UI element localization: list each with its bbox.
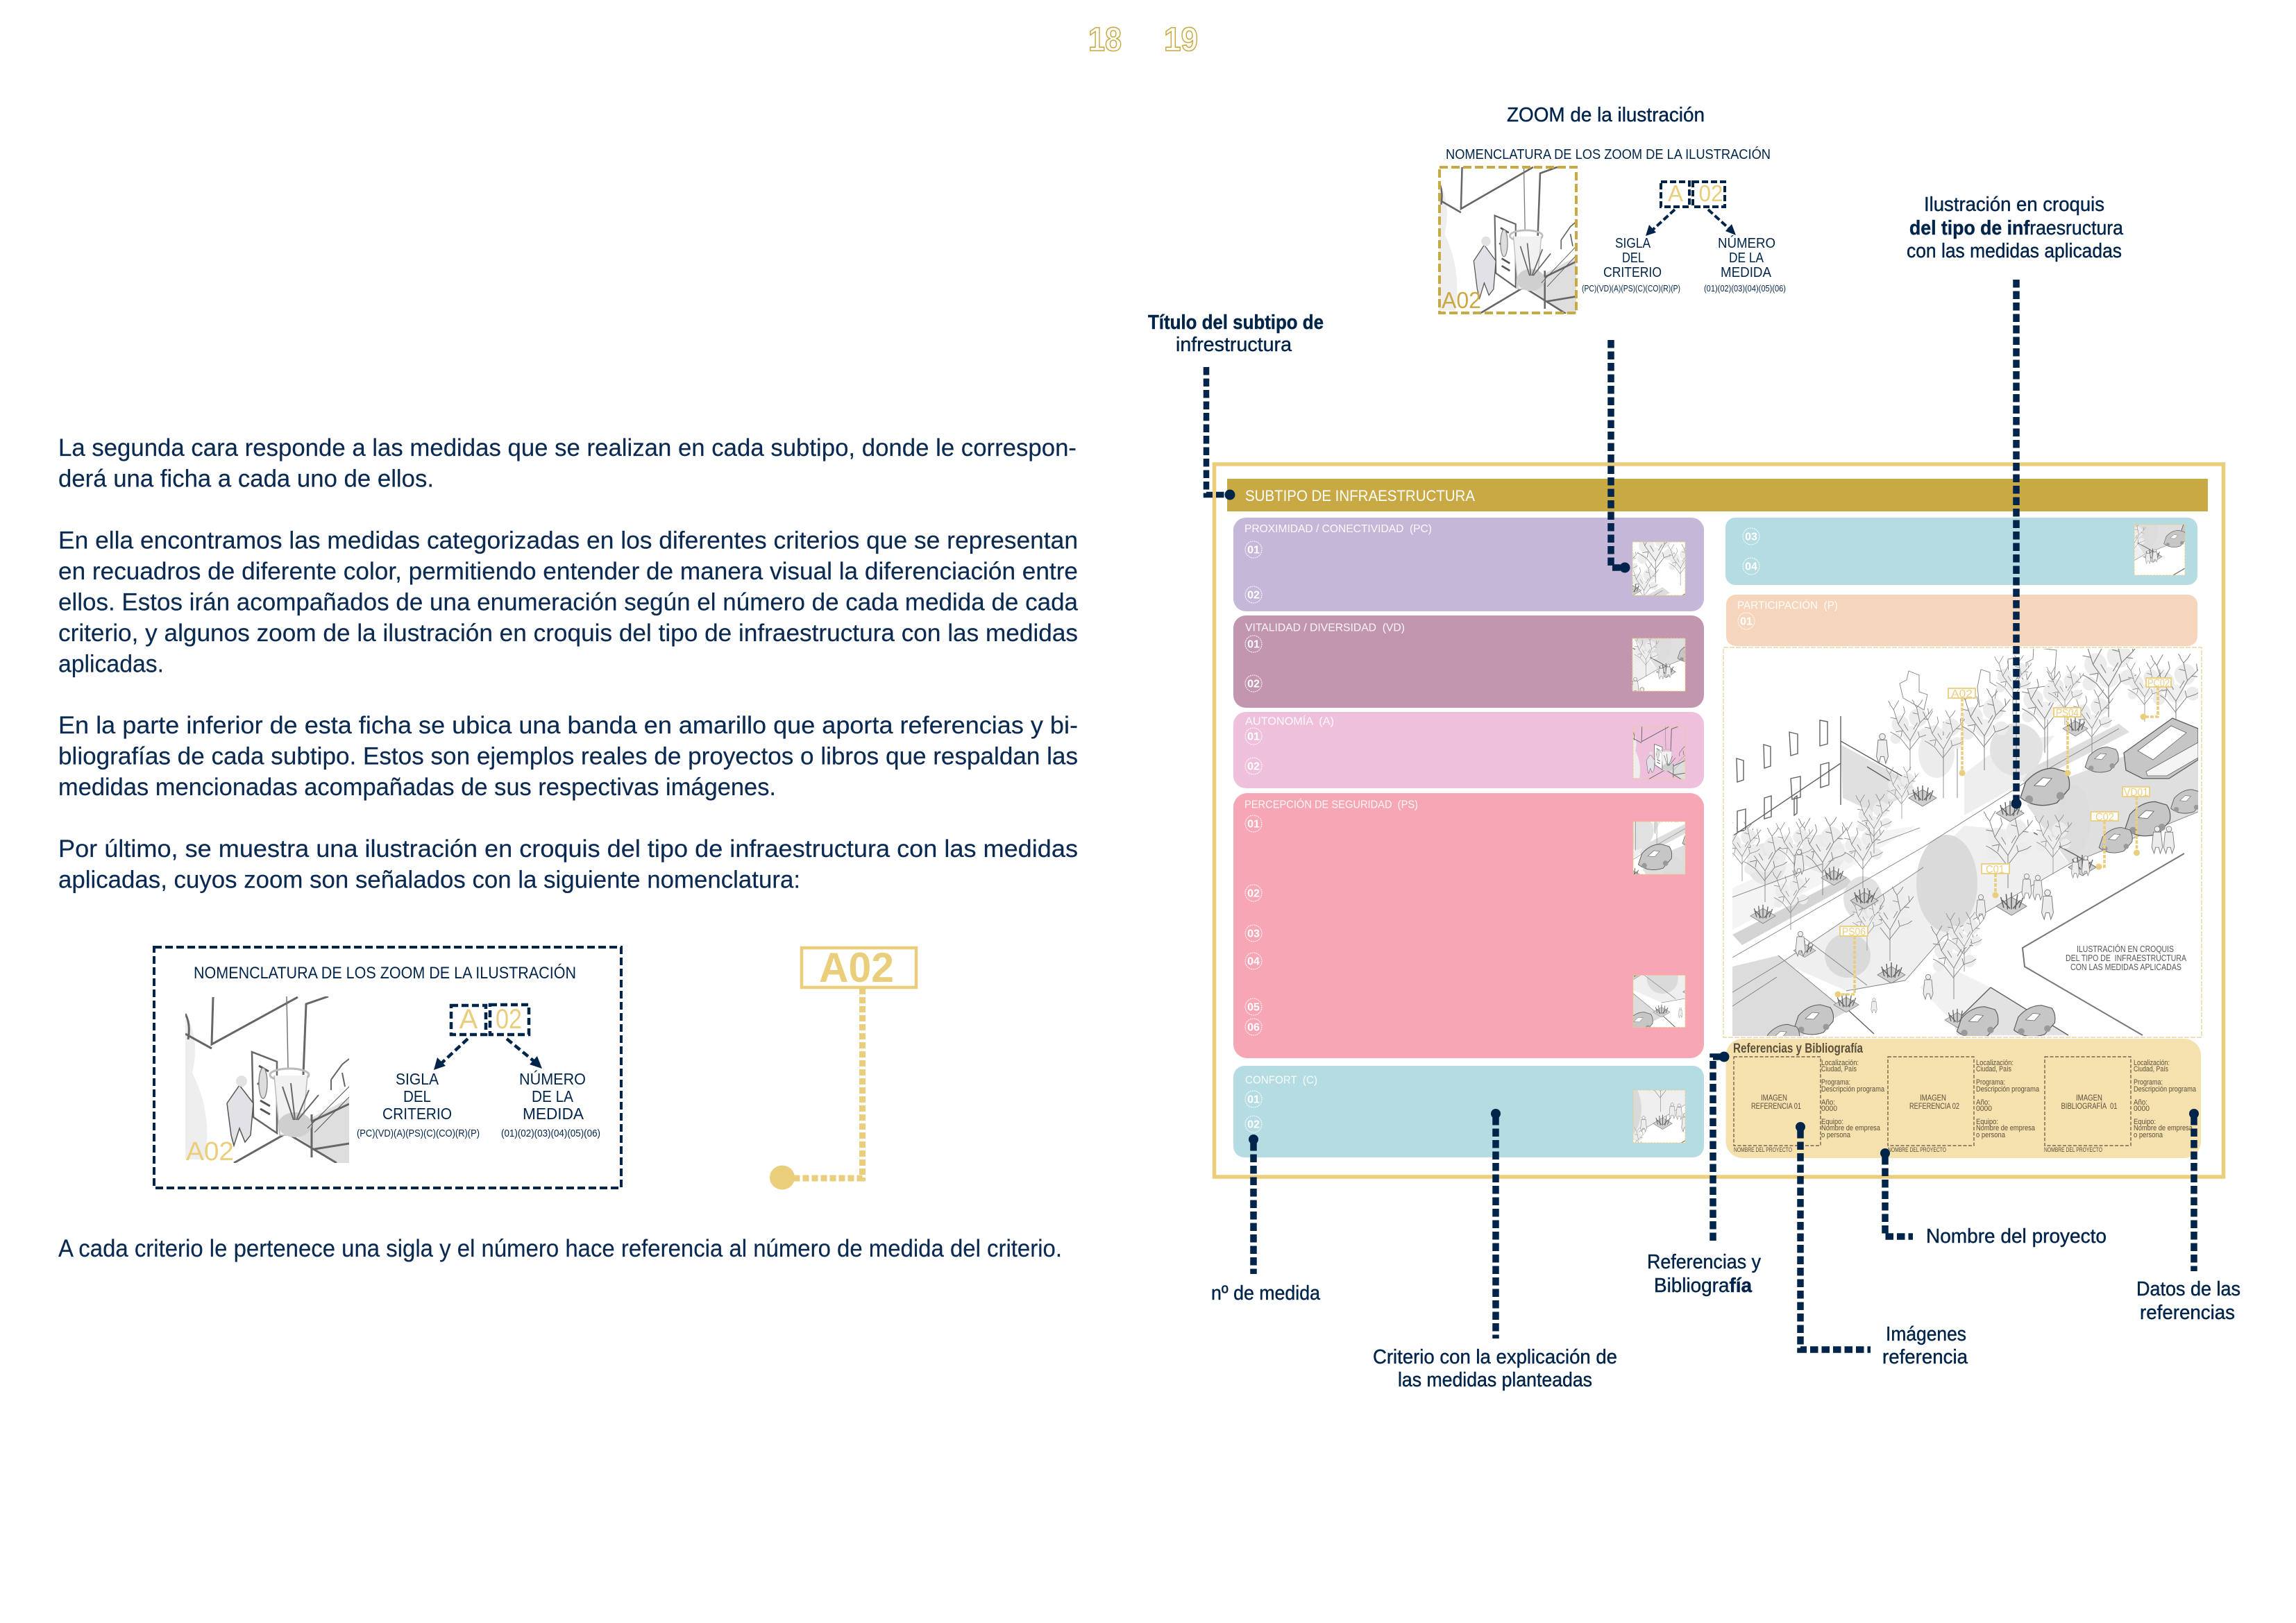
code boxes A and 02 xyxy=(451,1004,529,1035)
label: datos de las referencias: referencias xyxy=(2140,1302,2235,1324)
label: referencias y bibliografia xyxy=(1647,1251,1761,1297)
reference 02: Ciudad, País xyxy=(1976,1065,2011,1073)
bibliography 01: NOMBRE DEL PROYECTO xyxy=(2044,1146,2102,1154)
sigla del criterio: (PC)(VD)(A)(PS)(C)(CO)(R)(P) xyxy=(357,1128,480,1139)
tag C02: C02 xyxy=(2095,812,2114,823)
thumbnail: VD01 xyxy=(1419,509,1749,799)
bushes xyxy=(1850,888,1878,909)
thumbnail: A02 xyxy=(1633,726,1685,779)
label: datos de las referencias: Datos de las xyxy=(2136,1278,2240,1300)
paragraph 3 xyxy=(58,712,1078,801)
reference 01: Equipo: xyxy=(1821,1118,1843,1126)
paragraph 3: medidas mencionadas acompañadas de sus respectivas imágenes. xyxy=(58,774,776,801)
panel: confort xyxy=(1233,1066,1704,1157)
panel: vitalidad diversidad: VITALIDAD / DIVERSIDAD (VD) xyxy=(1245,622,1405,634)
small sigla text: (PC)(VD)(A)(PS)(C)(CO)(R)(P) xyxy=(1582,283,1680,294)
bibliography 01 xyxy=(2044,1057,2197,1154)
bibliography 01: BIBLIOGRAFÍA 01 xyxy=(2061,1102,2117,1111)
numero de la medida: MEDIDA xyxy=(523,1105,584,1123)
bibliography 01: o persona xyxy=(2134,1131,2163,1139)
title bar: SUBTIPO DE INFRAESTRUCTURA xyxy=(1245,487,1475,504)
reference 02: REFERENCIA 02 xyxy=(1909,1103,1959,1111)
thumbnail: PS06 xyxy=(1578,758,1905,1044)
label: criterio: Criterio con la explicación de xyxy=(1373,1346,1617,1368)
tag A02: A02 xyxy=(1951,688,1973,700)
panel: percepcion de seguridad: 01 xyxy=(1247,819,1260,830)
title bar xyxy=(1227,479,2208,511)
label: imagenes referencia: referencia xyxy=(1882,1346,1968,1368)
reference 01: REFERENCIA 01 xyxy=(1751,1103,1801,1111)
panel: vitalidad diversidad: 02 xyxy=(1247,679,1260,690)
paragraph 3: En la parte inferior de esta ficha se ubica una banda en amarillo que aporta referencias y bi- xyxy=(58,712,1078,739)
label: referencias y bibliografia: Bibliografía xyxy=(1654,1275,1753,1297)
leader: nombre del proyecto xyxy=(1880,1148,1913,1237)
small numero text: MEDIDA xyxy=(1721,265,1772,280)
paragraph 1 xyxy=(58,434,1077,493)
label: ilustracion en croquis xyxy=(1907,194,2124,262)
paragraph 2: en recuadros de diferente color, permitiendo entender de manera visual la diferenciación entre xyxy=(58,558,1078,585)
panel: autonomia: 01 xyxy=(1247,731,1260,742)
small arrow right xyxy=(1708,210,1736,235)
small arrow left xyxy=(1646,210,1675,236)
paragraph 4: aplicadas, cuyos zoom son señalados con la siguiente nomenclatura: xyxy=(58,866,800,894)
zoom sketch A02 xyxy=(185,996,349,1166)
reference 02: Programa: xyxy=(1976,1078,2005,1087)
reference 01: Programa: xyxy=(1821,1078,1850,1087)
small sigla text xyxy=(1582,236,1680,294)
label: titulo del subtipo xyxy=(1148,312,1324,356)
boundary of white corner xyxy=(2023,853,2184,1035)
small numero text: NÚMERO xyxy=(1718,235,1775,251)
caption inside illustration xyxy=(2066,944,2186,972)
label: criterio: las medidas planteadas xyxy=(1398,1369,1592,1391)
label: datos de las referencias xyxy=(2136,1278,2240,1324)
paragraph 4: Por último, se muestra una ilustración en croquis del tipo de infraestructura con las medidas xyxy=(58,835,1078,863)
reference 02: 0000 xyxy=(1976,1105,1992,1113)
paragraph 2: ellos. Estos irán acompañados de una enumeración según el número de cada medida de cada xyxy=(58,588,1079,616)
label: criterio xyxy=(1373,1346,1617,1391)
zoom sketch with gold dashed frame: A02 xyxy=(1442,287,1481,313)
label: ilustracion en croquis: del tipo de infraesructura xyxy=(1909,217,2124,239)
small code boxes xyxy=(1661,180,1725,207)
paragraph 1: derá una ficha a cada uno de ellos. xyxy=(58,465,434,493)
panel: vitalidad diversidad xyxy=(1233,615,1704,708)
bibliography 01: Equipo: xyxy=(2134,1118,2156,1126)
tag example A02 with yellow leader: A02 xyxy=(819,944,894,991)
reference 01: Año: xyxy=(1821,1098,1835,1107)
bus xyxy=(2124,718,2198,779)
panel: percepcion de seguridad: 06 xyxy=(1247,1021,1260,1034)
panel: proximidad conectividad: 01 xyxy=(1247,544,1260,556)
small numero text: (01)(02)(03)(04)(05)(06) xyxy=(1704,283,1786,294)
panel: references and bibliography xyxy=(1725,1039,2201,1158)
tag PC02 xyxy=(2141,677,2171,720)
label: ilustracion en croquis: con las medidas aplicadas xyxy=(1907,240,2122,262)
zoom sketch A02: A02 xyxy=(186,1137,234,1166)
label: numero de medida: nº de medida xyxy=(1211,1282,1321,1305)
numero de la medida xyxy=(501,1070,600,1139)
numero de la medida: DE LA xyxy=(532,1087,574,1105)
label: ilustracion en croquis: Ilustración en croquis xyxy=(1924,194,2104,216)
references heading: Referencias y Bibliografía xyxy=(1733,1042,1863,1056)
panel: confort continuation: 03 xyxy=(1745,532,1757,543)
code boxes A and 02: 02 xyxy=(496,1004,522,1035)
panel: vitalidad diversidad: 01 xyxy=(1247,638,1260,651)
reference 01: Nombre de empresa xyxy=(1821,1124,1881,1132)
thumbnail: PS04 xyxy=(1436,750,1762,1039)
building windows xyxy=(1737,720,1829,832)
reference 02: o persona xyxy=(1976,1131,2006,1139)
small nomenclature diagram xyxy=(1439,146,1786,314)
panel: confort: 01 xyxy=(1247,1094,1260,1106)
leader: numero de medida xyxy=(1249,1135,1258,1274)
panel: percepcion de seguridad: 05 xyxy=(1247,1002,1260,1013)
panel: percepcion de seguridad: 04 xyxy=(1247,956,1260,967)
tag VD01: VD01 xyxy=(2124,787,2148,799)
panel: autonomia: 02 xyxy=(1247,760,1260,773)
small sigla text: SIGLA xyxy=(1615,236,1651,251)
panel: confort continuation xyxy=(1725,518,2197,585)
label: nombre del proyecto: Nombre del proyecto xyxy=(1926,1225,2107,1248)
sigla del criterio xyxy=(357,1070,480,1139)
small nomenclature heading: NOMENCLATURA DE LOS ZOOM DE LA ILUSTRACIÓN xyxy=(1446,146,1771,162)
panel: confort: CONFORT (C) xyxy=(1245,1074,1317,1087)
leader: imagenes xyxy=(1796,1122,1871,1350)
paragraph 2: criterio, y algunos zoom de la ilustración en croquis del tipo de infraestructura con las medidas xyxy=(58,620,1078,647)
label: imagenes referencia xyxy=(1882,1323,1968,1368)
thumbnail: C02 xyxy=(1915,401,2232,679)
closing sentence: A cada criterio le pertenece una sigla y el número hace referencia al número de medida del criterio. xyxy=(58,1235,1062,1262)
label: referencias y bibliografia: Referencias y xyxy=(1647,1251,1761,1273)
label: ZOOM de la ilustracion: ZOOM de la ilustración xyxy=(1507,104,1705,126)
trees xyxy=(1889,699,1932,770)
tag C01 xyxy=(1982,864,2009,898)
cars xyxy=(2085,747,2118,772)
page number 18: 18 xyxy=(1088,22,1122,58)
reference 02: Descripción programa xyxy=(1976,1085,2040,1094)
tag A02 xyxy=(1948,688,1975,776)
arrow to sigla xyxy=(434,1039,468,1070)
paragraph 4 xyxy=(58,835,1078,894)
tree canopies xyxy=(1916,835,1977,932)
thumbnail: C01 xyxy=(1483,950,1782,1216)
panel: percepcion de seguridad xyxy=(1233,793,1704,1058)
bibliography 01: 0000 xyxy=(2134,1105,2150,1113)
reference 01: Ciudad, País xyxy=(1821,1065,1857,1073)
zoom sketch with gold dashed frame xyxy=(1439,167,1576,314)
panel: participacion xyxy=(1726,595,2197,646)
panel: percepcion de seguridad: PERCEPCIÓN DE SEGURIDAD (PS) xyxy=(1244,799,1418,810)
panel: participacion: 01 xyxy=(1740,616,1753,627)
panel: fact sheet frame xyxy=(1215,464,2224,1177)
sigla del criterio: SIGLA xyxy=(396,1070,439,1088)
panel: proximidad conectividad: 02 xyxy=(1247,590,1260,601)
tag example A02 with yellow leader xyxy=(770,944,916,1189)
bibliography 01: Localización: xyxy=(2134,1059,2170,1067)
panel: confort continuation: 04 xyxy=(1745,561,1757,573)
label: titulo del subtipo: Título del subtipo de xyxy=(1148,312,1324,334)
small sigla text: CRITERIO xyxy=(1603,265,1662,280)
leader: criterio xyxy=(1491,1109,1501,1339)
small numero text: DE LA xyxy=(1729,250,1764,266)
bibliography 01: Programa: xyxy=(2134,1078,2163,1087)
reference 02: IMAGEN xyxy=(1920,1094,1946,1103)
leader: titulo del subtipo xyxy=(1206,367,1235,500)
paragraph 2 xyxy=(58,527,1079,677)
small sigla text: DEL xyxy=(1622,250,1644,266)
reference 02: NOMBRE DEL PROYECTO xyxy=(1888,1146,1946,1154)
panel: confort: 02 xyxy=(1247,1119,1260,1131)
label: imagenes referencia: Imágenes xyxy=(1886,1323,1966,1345)
reference 01: o persona xyxy=(1821,1131,1851,1139)
reference 02: Año: xyxy=(1976,1098,1990,1107)
reference 01: NOMBRE DEL PROYECTO xyxy=(1734,1146,1792,1154)
reference 02: Equipo: xyxy=(1976,1118,1998,1126)
leader: referencias xyxy=(1713,1052,1730,1241)
grey pavements xyxy=(1841,745,1916,812)
thumbnail: PC02 xyxy=(1390,523,1720,817)
bibliography 01: Descripción programa xyxy=(2134,1085,2197,1094)
bibliography 01: IMAGEN xyxy=(2076,1094,2102,1103)
caption inside illustration: CON LAS MEDIDAS APLICADAS xyxy=(2070,962,2181,972)
bibliography 01: Nombre de empresa xyxy=(2134,1124,2193,1132)
panel: autonomia: AUTONOMÍA (A) xyxy=(1245,716,1334,727)
nomenclature heading: NOMENCLATURA DE LOS ZOOM DE LA ILUSTRACIÓN xyxy=(194,964,576,983)
panel: proximidad conectividad: PROXIMIDAD / CONECTIVIDAD (PC) xyxy=(1244,523,1432,535)
reference 01: 0000 xyxy=(1821,1105,1837,1113)
panel: nomenclature box xyxy=(154,947,621,1188)
caption inside illustration: ILUSTRACIÓN EN CROQUIS xyxy=(2077,944,2174,954)
panel: percepcion de seguridad: 03 xyxy=(1247,928,1260,940)
bibliography 01: Año: xyxy=(2134,1098,2147,1107)
tag PS04 xyxy=(2054,708,2081,776)
tag C01: C01 xyxy=(1986,864,2004,876)
leader: zoom xyxy=(1611,340,1630,573)
page number 19: 19 xyxy=(1164,22,1198,58)
people xyxy=(1796,931,1805,956)
leader: datos xyxy=(2189,1109,2199,1271)
paragraph 1: La segunda cara responde a las medidas que se realizan en cada subtipo, donde le correspon- xyxy=(58,434,1077,461)
leader: ilustracion xyxy=(2011,280,2021,809)
tag PC02: PC02 xyxy=(2147,677,2170,690)
tag PS06: PS06 xyxy=(1842,926,1866,938)
tag PS04: PS04 xyxy=(2056,708,2079,719)
sigla del criterio: DEL xyxy=(403,1087,431,1105)
tag C02 xyxy=(2091,812,2118,870)
reference 02: Localización: xyxy=(1976,1059,2014,1067)
paragraph 2: aplicadas. xyxy=(58,651,164,677)
panel: proximidad conectividad xyxy=(1233,518,1704,611)
reference 01: Localización: xyxy=(1821,1059,1859,1067)
reference 01: Descripción programa xyxy=(1821,1085,1885,1094)
reference 01 xyxy=(1734,1057,1885,1154)
caption inside illustration: DEL TIPO DE INFRAESTRUCTURA xyxy=(2066,953,2186,963)
paragraph 2: En ella encontramos las medidas categorizadas en los diferentes criterios que se representan xyxy=(58,527,1078,554)
numero de la medida: (01)(02)(03)(04)(05)(06) xyxy=(501,1128,600,1139)
panel: autonomia xyxy=(1233,712,1704,788)
illustration: isometric street sketch xyxy=(1723,632,2202,1051)
sigla del criterio: CRITERIO xyxy=(382,1105,452,1123)
bibliography 01: Ciudad, País xyxy=(2134,1065,2168,1073)
reference 02 xyxy=(1888,1057,2040,1154)
paragraph 3: bliografías de cada subtipo. Estos son ejemplos reales de proyectos o libros que respaldan las xyxy=(58,742,1078,770)
tag PS06 xyxy=(1835,926,1868,998)
numero de la medida: NÚMERO xyxy=(519,1070,586,1088)
label: titulo del subtipo: infrestructura xyxy=(1176,334,1292,356)
reference 01: IMAGEN xyxy=(1761,1094,1787,1103)
small code boxes: 02 xyxy=(1699,180,1723,206)
small code boxes: A xyxy=(1668,180,1683,206)
panel: percepcion de seguridad: 02 xyxy=(1247,888,1260,899)
code boxes A and 02: A xyxy=(459,1004,478,1035)
panel: participacion: PARTICIPACIÓN (P) xyxy=(1737,600,1838,612)
street edge lines xyxy=(1732,694,2198,1012)
small numero text xyxy=(1704,235,1786,294)
text block: body paragraphs xyxy=(58,434,1079,894)
arrow to numero xyxy=(507,1039,542,1069)
reference 02: Nombre de empresa xyxy=(1976,1124,2036,1132)
tag VD01 xyxy=(2122,787,2150,856)
